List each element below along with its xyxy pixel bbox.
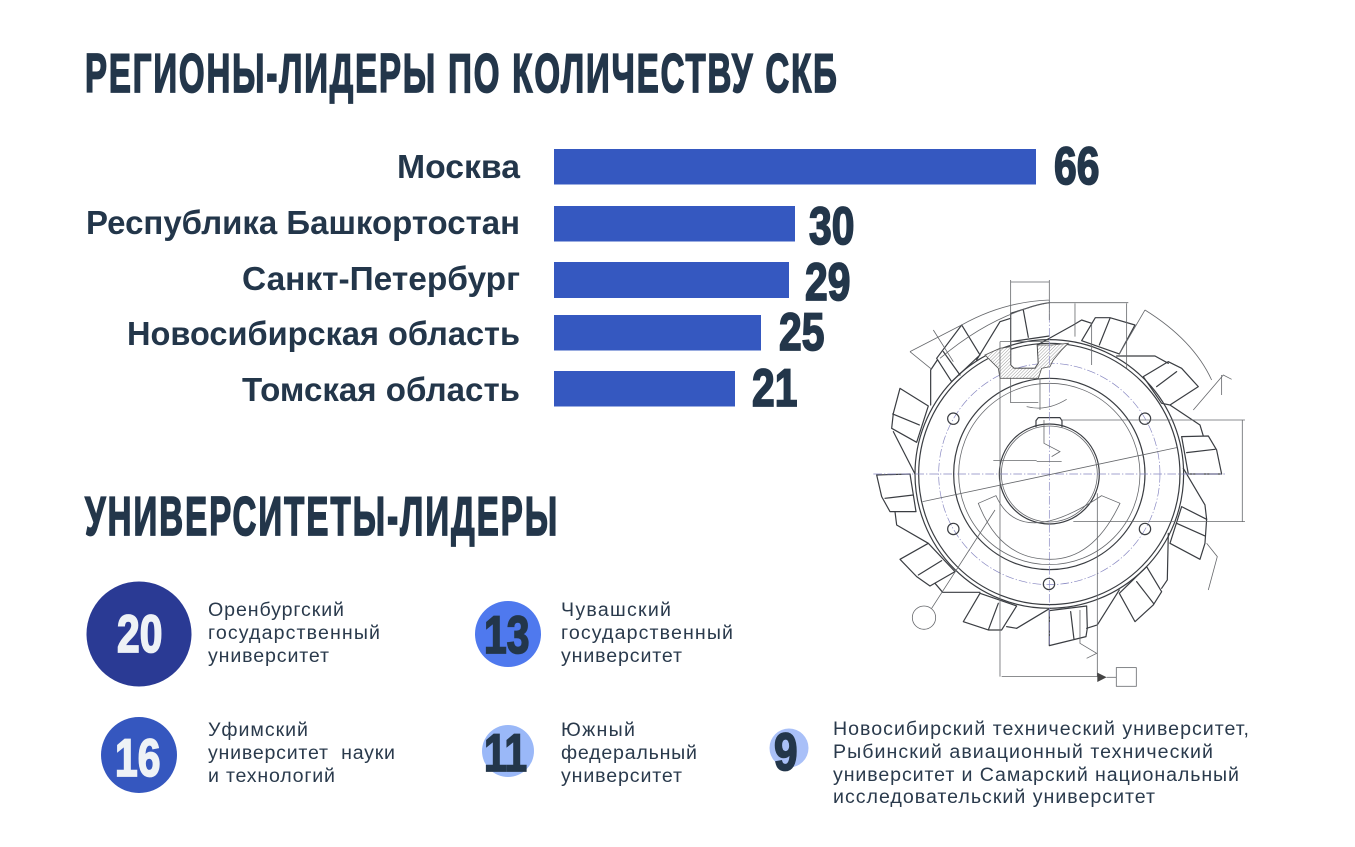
- item: 20 Оренбургский: [86, 582, 380, 686]
- item: 9 Новосибирский, Рыбинский, Самарский: университет и Самарский национальный: [833, 764, 1239, 786]
- row: Москва: Москва: [397, 148, 521, 185]
- row: Санкт-Петербург: Санкт-Петербург: [242, 260, 520, 297]
- inner arcs: [978, 496, 1120, 559]
- item: 11 Южный: университет: [561, 765, 682, 787]
- item: 16 Уфимский: Уфимский: [208, 719, 308, 741]
- keyway: [1036, 418, 1062, 427]
- item: 13 Чувашский: государственный: [561, 622, 733, 644]
- item: 9 Новосибирский, Рыбинский, Самарский: Новосибирский технический университет,: [833, 718, 1249, 740]
- item: 13 Чувашский: университет: [561, 645, 682, 667]
- item: 20 Оренбургский: Оренбургский: [208, 599, 344, 621]
- item: 20 Оренбургский: 20: [117, 605, 162, 664]
- title: regions: РЕГИОНЫ-ЛИДЕРЫ ПО КОЛИЧЕСТВУ СКБ: [85, 42, 837, 104]
- item: 20 Оренбургский: государственный: [208, 622, 380, 644]
- title: universities: УНИВЕРСИТЕТЫ-ЛИДЕРЫ: [85, 485, 557, 547]
- row: Москва: 66: [1054, 137, 1099, 196]
- technical drawing: milling cutter: [873, 280, 1245, 686]
- dimension lines: [873, 280, 1245, 686]
- cutter discs: [915, 340, 1184, 608]
- cutter teeth: [877, 303, 1222, 646]
- mounting holes: [948, 413, 1151, 590]
- row: Томская область: [242, 359, 797, 418]
- hatched section: [985, 343, 1068, 378]
- item: 9 Новосибирский, Рыбинский, Самарский: Рыбинский авиационный технический: [833, 741, 1213, 763]
- row: Томская область: Томская область: [242, 371, 520, 408]
- row: Санкт-Петербург: 29: [805, 253, 850, 312]
- row: Томская область: 21: [752, 359, 797, 418]
- item: 16 Уфимский: и технологий: [208, 765, 335, 787]
- bar chart: regions: [86, 137, 1099, 418]
- item: 13 Чувашский: 13: [484, 606, 529, 665]
- item: 16 Уфимский: [101, 717, 395, 793]
- item: 11 Южный: федеральный: [561, 742, 697, 764]
- row: Новосибирская область: 25: [779, 303, 824, 362]
- item: 13 Чувашский: Чувашский: [561, 599, 671, 621]
- item: 9 Новосибирский, Рыбинский, Самарский: [770, 718, 1249, 808]
- row: Новосибирская область: Новосибирская область: [127, 315, 520, 352]
- row: Республика Башкортостан: Республика Башкортостан: [86, 204, 520, 241]
- universities list: [86, 582, 1249, 808]
- item: 16 Уфимский: 16: [115, 729, 160, 788]
- item: 13 Чувашский: [475, 599, 733, 667]
- item: 16 Уфимский: университет науки: [208, 742, 395, 764]
- row: Москва: [397, 137, 1099, 196]
- item: 20 Оренбургский: университет: [208, 645, 329, 667]
- row: Республика Башкортостан: 30: [809, 197, 854, 256]
- item: 9 Новосибирский, Рыбинский, Самарский: 9: [774, 724, 798, 782]
- item: 11 Южный: [482, 719, 697, 787]
- row: Санкт-Петербург: [242, 253, 850, 312]
- item: 11 Южный: 11: [484, 724, 527, 783]
- row: Республика Башкортостан: [86, 197, 854, 256]
- row: Новосибирская область: [127, 303, 824, 362]
- item: 11 Южный: Южный: [561, 719, 635, 741]
- item: 9 Новосибирский, Рыбинский, Самарский: исследовательский университет: [833, 786, 1155, 808]
